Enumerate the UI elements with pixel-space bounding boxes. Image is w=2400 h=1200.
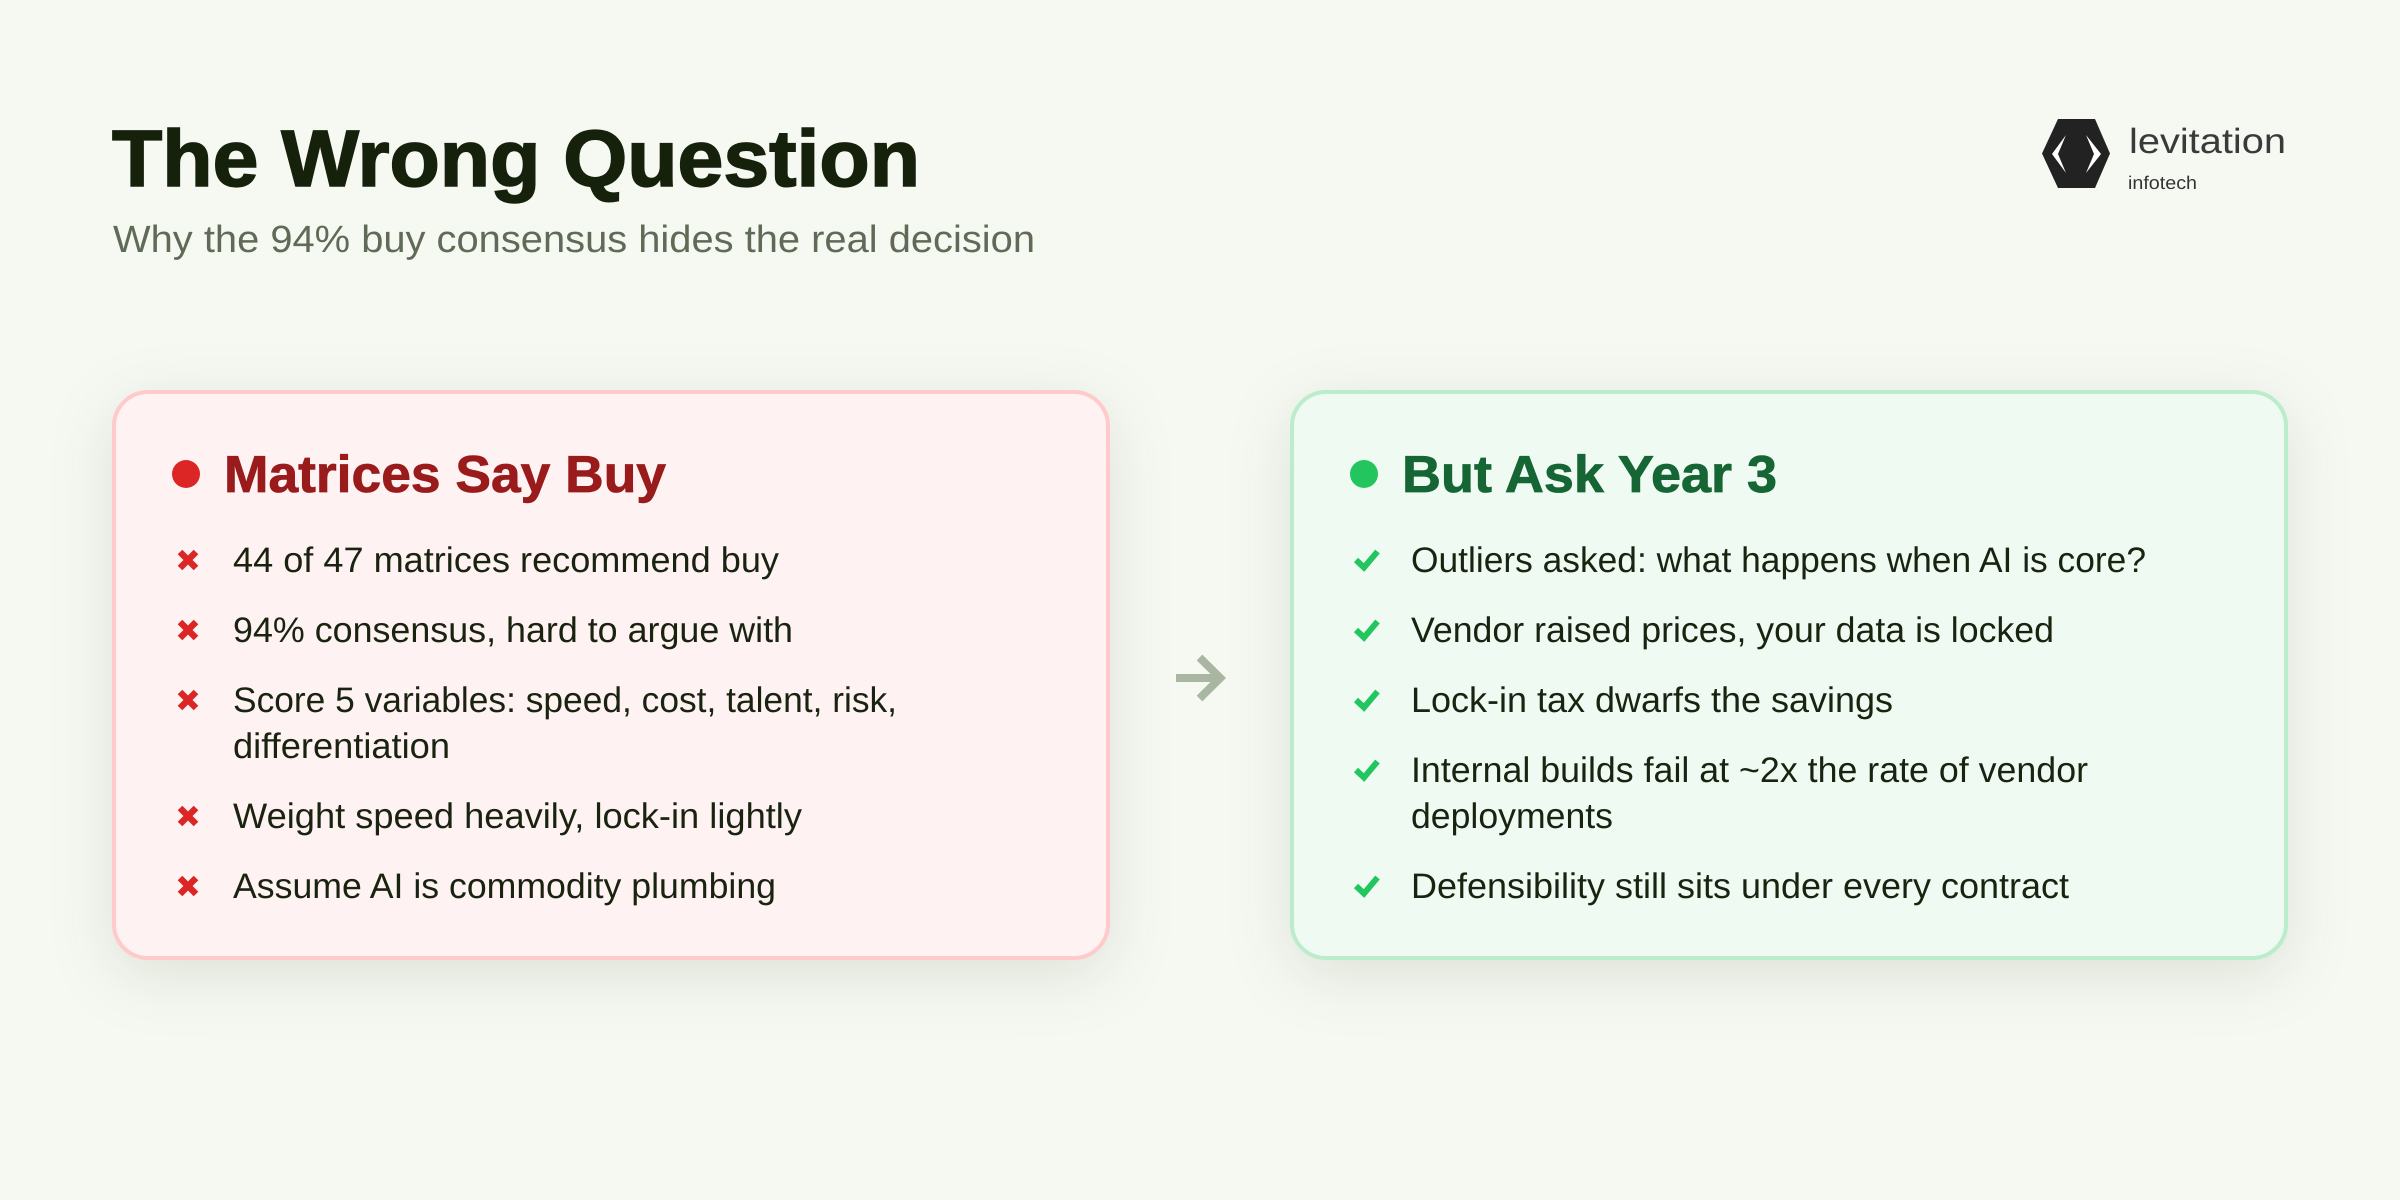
panel heading: But Ask Year 3 <box>1402 446 1777 504</box>
logo wordmark: levitation <box>2129 122 2286 161</box>
list item 3: Lock-in tax dwarfs the savings <box>1411 680 1893 720</box>
list item 1: 44 of 47 matrices recommend buy <box>233 540 779 580</box>
panel dot <box>1350 460 1378 488</box>
panel background <box>1292 392 2286 958</box>
list item 3: differentiation <box>233 726 450 766</box>
list item 2: Vendor raised prices, your data is locked <box>1411 610 2054 650</box>
panel: matrices say buy <box>114 392 1108 958</box>
list item 4: Weight speed heavily, lock-in lightly <box>233 796 802 836</box>
subtitle: Why the 94% buy consensus hides the real decision <box>113 219 1035 261</box>
title: The Wrong Question <box>112 114 920 203</box>
panel heading: Matrices Say Buy <box>224 446 666 504</box>
list item 5: Defensibility still sits under every contract <box>1411 866 2069 906</box>
panel: but ask year 3 <box>1292 392 2286 958</box>
logo sub-wordmark: infotech <box>2128 172 2197 193</box>
list item 2: 94% consensus, hard to argue with <box>233 610 793 650</box>
list item 4: deployments <box>1411 796 1613 836</box>
list item 3: Score 5 variables: speed, cost, talent, risk, <box>233 680 897 720</box>
panel dot <box>172 460 200 488</box>
logo: levitation infotech <box>2042 119 2286 193</box>
list item 4 <box>1356 750 2088 836</box>
list item 5: Assume AI is commodity plumbing <box>233 866 776 906</box>
header: title and subtitle <box>112 114 1035 261</box>
list item 4: Internal builds fail at ~2x the rate of vendor <box>1411 750 2088 790</box>
arrow <box>1176 658 1220 698</box>
list item 3 <box>180 680 897 766</box>
panel background <box>114 392 1108 958</box>
icon: hexagon with chevrons <box>2042 119 2110 188</box>
list item 1: Outliers asked: what happens when AI is core? <box>1411 540 2146 580</box>
